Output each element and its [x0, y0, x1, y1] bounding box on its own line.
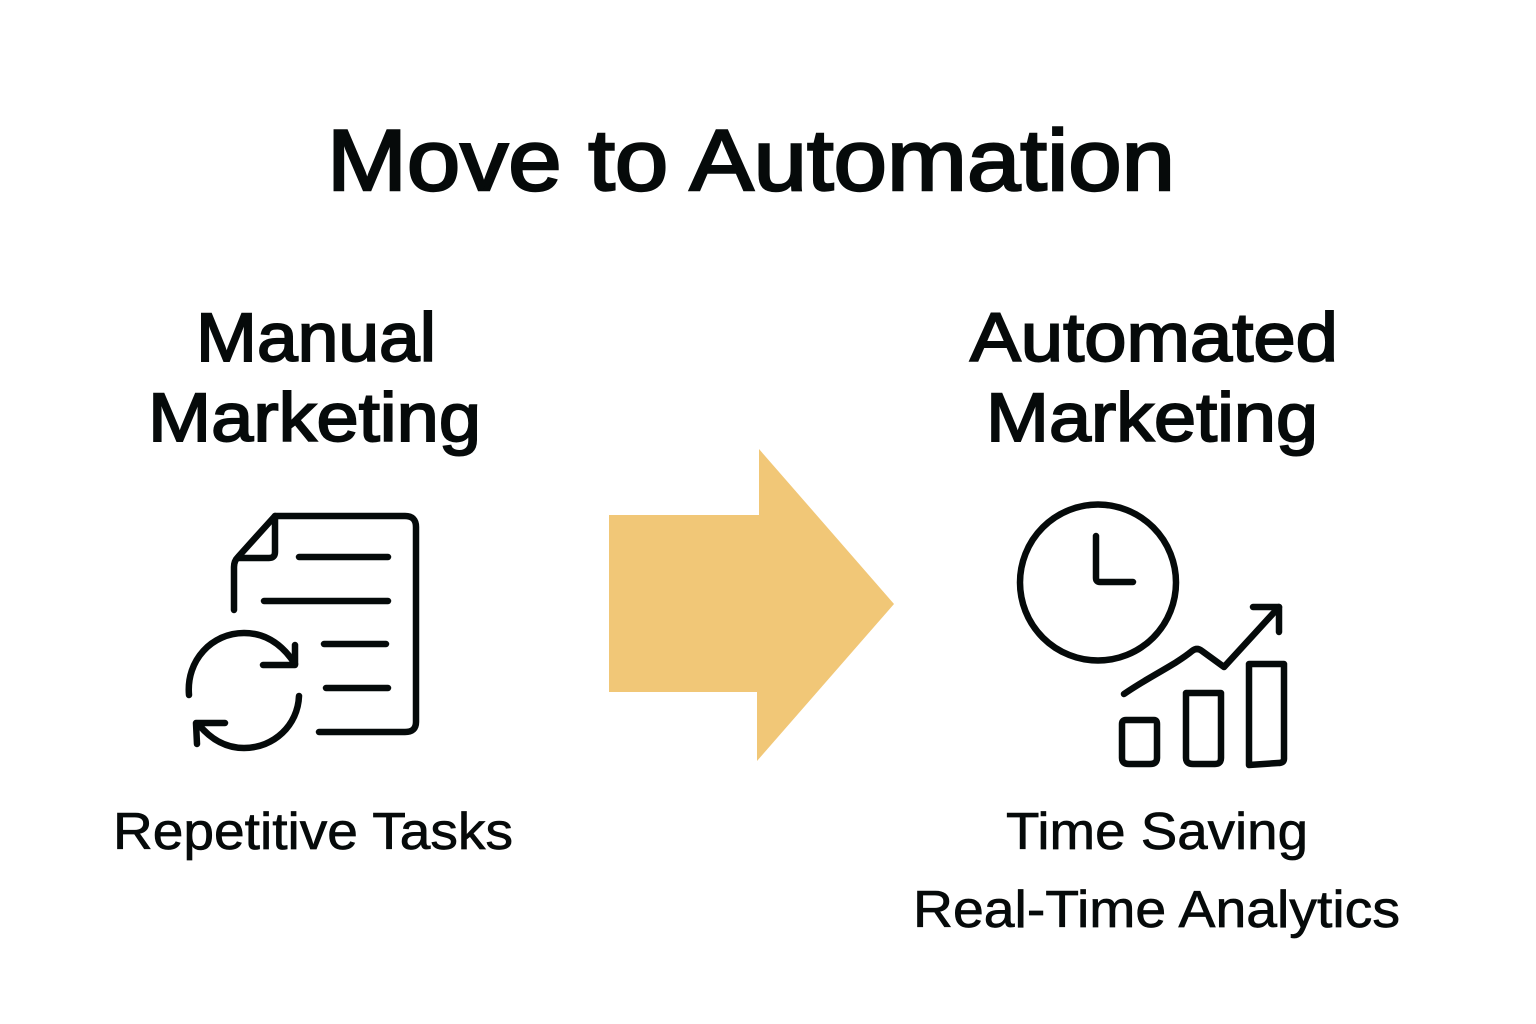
panel: automated marketing [913, 299, 1400, 939]
heading: automated marketing: Marketing [986, 379, 1318, 456]
heading: automated marketing: Automated [970, 299, 1338, 376]
icon: rising bar chart [1122, 607, 1284, 765]
icon: document with repeat arrows [189, 516, 416, 748]
panel: manual marketing [113, 299, 513, 861]
heading: manual marketing: Marketing [148, 379, 481, 456]
label: time saving: Time Saving [1006, 803, 1308, 861]
heading: automated marketing [970, 299, 1338, 456]
arrow: manual to automated [609, 449, 894, 761]
label: real-time analytics: Real-Time Analytics [913, 881, 1400, 939]
heading: manual marketing [148, 299, 481, 456]
title: Move to Automation [327, 113, 1175, 209]
heading: manual marketing: Manual [196, 299, 436, 376]
icon: clock [1020, 504, 1176, 660]
label: repetitive tasks: Repetitive Tasks [113, 803, 513, 861]
